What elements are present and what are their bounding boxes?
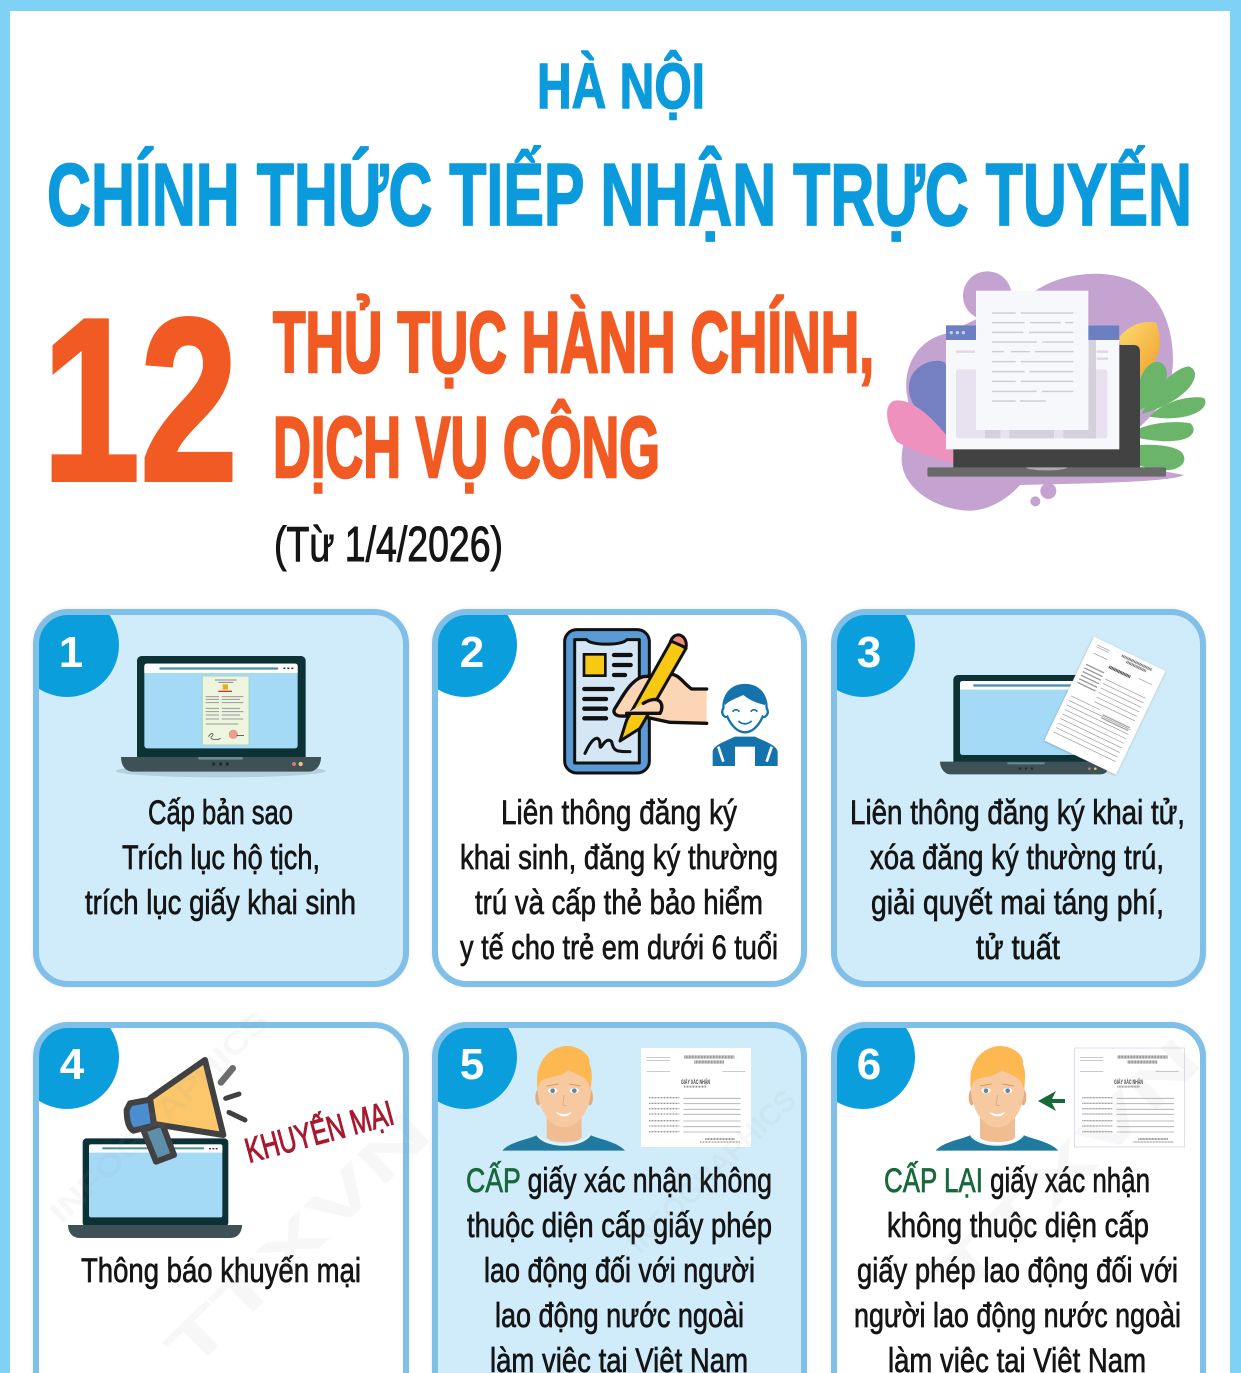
text block 5: lao động đối với người <box>484 1252 755 1290</box>
panel 4: thông báo khuyến mại <box>15 1005 406 1373</box>
icon: document <box>1074 1048 1184 1147</box>
panel 2: liên thông đăng ký khai sinh <box>413 593 804 984</box>
heading: thủ tục hành chính: THỦ TỤC HÀNH CHÍNH, <box>273 295 874 391</box>
icon: person <box>936 1046 1058 1151</box>
icon: document: GIẤY XÁC NHẬN <box>1114 1079 1143 1086</box>
text block 6: không thuộc diện cấp <box>887 1207 1149 1245</box>
number 2: 2 <box>460 628 484 677</box>
hero illustration: laptop with document and leaves <box>887 271 1205 511</box>
text block 6 <box>854 1162 1181 1373</box>
panel 3: liên thông đăng ký khai tử <box>811 593 1203 984</box>
text block 2: Liên thông đăng ký <box>501 794 737 832</box>
number 1: 1 <box>59 628 83 677</box>
panel 5: cấp giấy xác nhận <box>413 1005 804 1373</box>
text block 3: giải quyết mai táng phí, <box>871 884 1164 922</box>
text block 2: y tế cho trẻ em dưới 6 tuổi <box>460 929 778 967</box>
big number 12: 12 <box>42 271 238 530</box>
icon: document: GIẤY XÁC NHẬN <box>681 1079 710 1086</box>
text block 5: thuộc diện cấp giấy phép <box>467 1207 772 1245</box>
heading: dịch vụ công: DỊCH VỤ CÔNG <box>273 400 660 496</box>
date note: (Từ 1/4/2026) <box>274 518 503 572</box>
panel 6: cấp lại giấy xác nhận <box>811 1005 1203 1373</box>
icon: document <box>641 1048 751 1147</box>
number 6: 6 <box>857 1040 881 1089</box>
icon: person <box>502 1046 625 1151</box>
panel 1: cấp bản sao <box>15 593 406 984</box>
number 4: 4 <box>60 1040 85 1089</box>
watermarks: TTXVN <box>922 1025 1214 1309</box>
icon: laptop with megaphone <box>68 1060 245 1238</box>
text block 4: Thông báo khuyến mại <box>81 1252 361 1290</box>
text block 3: tử tuất <box>976 929 1060 967</box>
icon: laptop with paper <box>940 637 1166 775</box>
watermarks <box>44 1005 1214 1373</box>
title: Hà Nội: HÀ NỘI <box>537 49 705 122</box>
text block 1 <box>85 794 356 922</box>
label: khuyến mại: KHUYẾN MẠI <box>241 1093 398 1171</box>
text block 3: xóa đăng ký thường trú, <box>870 839 1164 877</box>
text block 6: CẤP LẠI giấy xác nhận <box>884 1162 1150 1200</box>
text block 3 <box>850 794 1185 967</box>
text block 1: trích lục giấy khai sinh <box>85 884 356 922</box>
text block 5 <box>466 1162 772 1373</box>
text block 5: lao động nước ngoài <box>495 1297 744 1335</box>
icon: phone, hand and pencil <box>565 630 778 773</box>
text block 1: Trích lục hộ tịch, <box>122 839 320 877</box>
number 3: 3 <box>857 628 881 677</box>
number 5: 5 <box>460 1040 484 1089</box>
text block 2 <box>460 794 778 967</box>
text block 5: CẤP giấy xác nhận không <box>466 1162 772 1200</box>
text block 2: trú và cấp thẻ bảo hiểm <box>475 884 763 922</box>
text block 2: khai sinh, đăng ký thường <box>460 839 778 877</box>
watermarks: INFOGRAPHICS <box>622 1083 803 1260</box>
icon: laptop with certificate <box>116 656 326 777</box>
text block 1: Cấp bản sao <box>148 794 293 832</box>
arrow <box>1038 1091 1065 1111</box>
watermarks: INFOGRAPHICS <box>44 1005 275 1230</box>
